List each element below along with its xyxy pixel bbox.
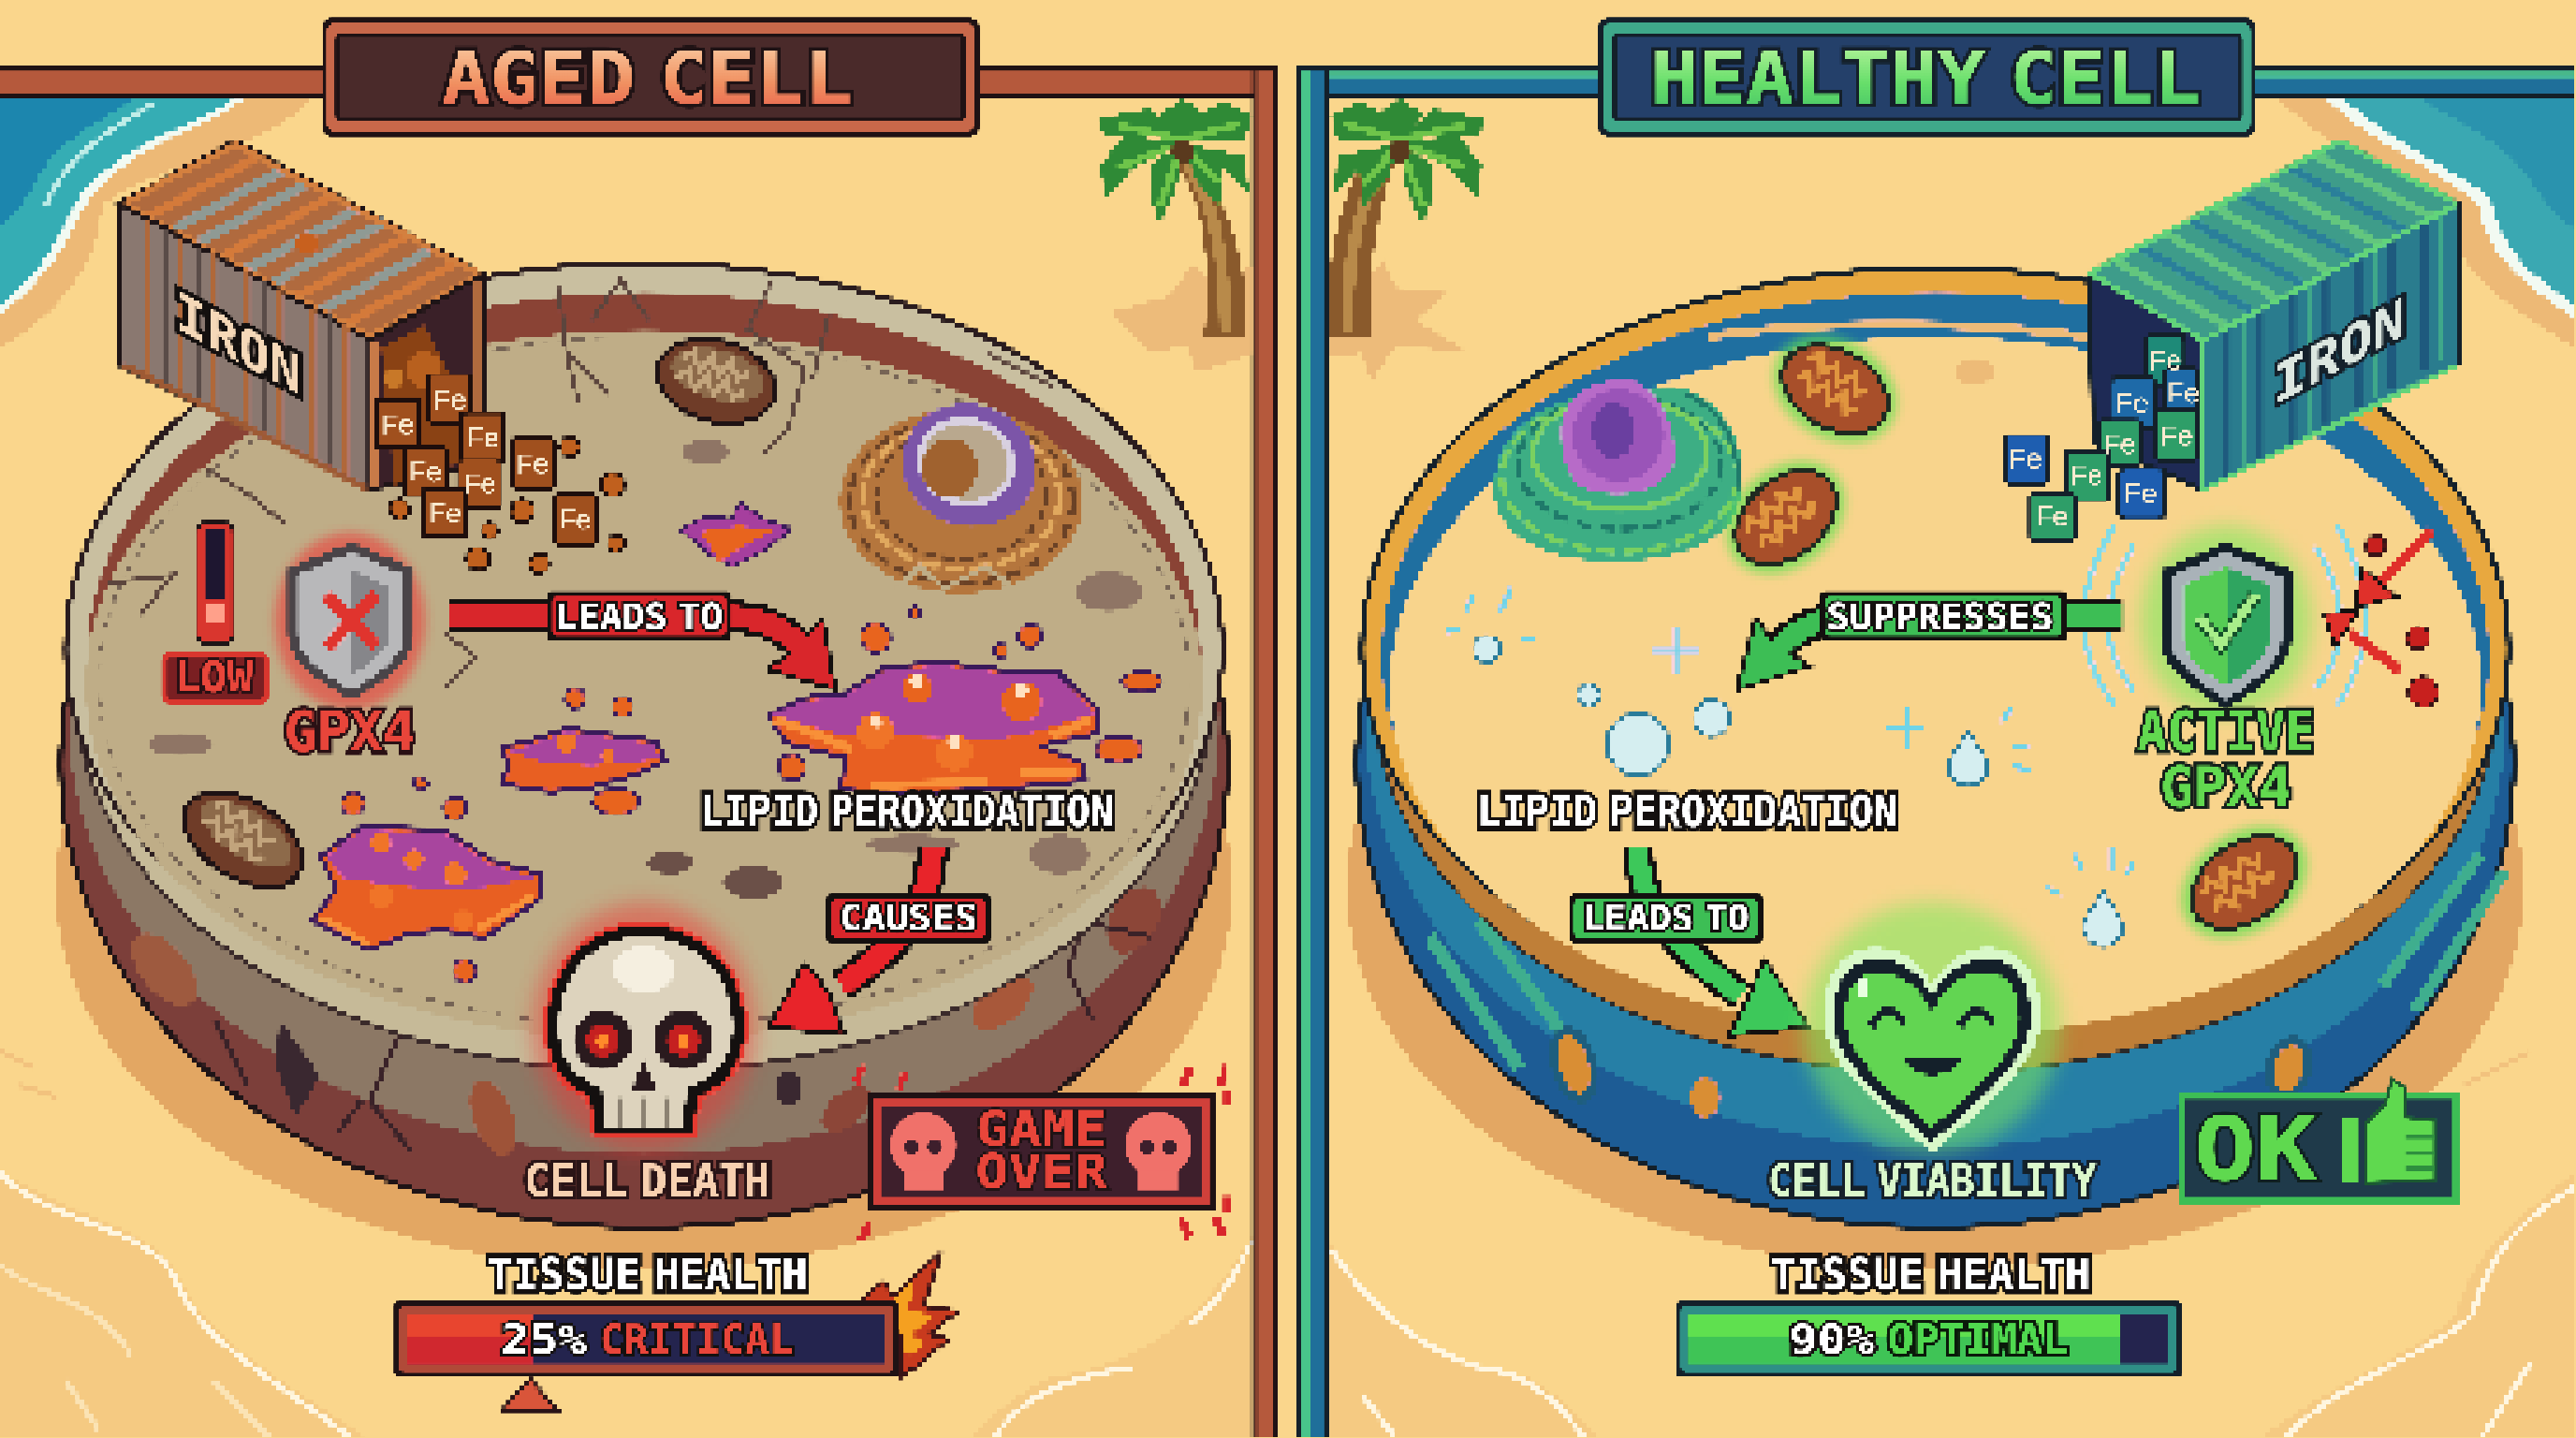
indicator triangle — [503, 1380, 559, 1410]
label: leads to: LEADS TO — [1582, 897, 1749, 939]
iron cubes — [376, 374, 596, 544]
skull icon right — [1125, 1112, 1191, 1190]
health bar 90 percent — [1676, 1301, 2182, 1377]
game over badge: GAME — [976, 1102, 1107, 1157]
lipid droplets — [342, 608, 1162, 983]
sparkles — [1445, 588, 2132, 896]
label: active gpx4: ACTIVE — [2137, 700, 2315, 765]
iron cube labels: Fe — [463, 469, 496, 500]
small purple spill — [681, 503, 792, 567]
label: causes — [827, 894, 990, 943]
leads to arrow — [448, 616, 833, 687]
health bar 25 percent: 25% — [501, 1316, 587, 1364]
iron cube labels: Fe — [429, 498, 461, 529]
title: aged cell: AGED CELL — [442, 37, 853, 122]
label: iron: IRON — [176, 280, 300, 408]
label: leads to: LEADS TO — [555, 596, 723, 638]
iron nuggets — [389, 437, 624, 574]
ocean top left — [0, 95, 315, 348]
healthy mitochondrion one — [1753, 314, 1917, 465]
iron container — [120, 141, 487, 490]
skull icon left — [890, 1112, 956, 1190]
broken shield — [287, 542, 414, 700]
iron cube labels: Fe — [2124, 478, 2157, 509]
aged cell text and badges — [165, 18, 1216, 1377]
iron cube labels — [381, 385, 592, 536]
healthy mitochondrion two — [1704, 437, 1867, 597]
shield glow — [274, 533, 426, 710]
frame: aged panel — [0, 66, 1278, 1438]
energy arcs — [2084, 526, 2364, 705]
healthy cell text and badges — [1477, 18, 2459, 1377]
water droplets — [1473, 636, 2123, 946]
label: lipid peroxidation: LIPID PEROXIDATION — [1477, 786, 1897, 838]
label: tissue health: TISSUE HEALTH — [487, 1250, 808, 1301]
iron cube labels: Fe — [2167, 378, 2200, 409]
game over badge: OVER — [976, 1145, 1107, 1200]
thumb icon — [2343, 1079, 2435, 1183]
floor stains — [148, 439, 1142, 899]
label: active gpx4: GPX4 — [2160, 756, 2291, 821]
label: suppresses: SUPPRESSES — [1827, 596, 2054, 638]
cell floor — [1390, 337, 2481, 1036]
causes arrow — [772, 846, 933, 1032]
stone rim — [66, 263, 1222, 1071]
health bar 25 percent: CRITICAL — [600, 1316, 794, 1364]
ocean top right — [2276, 95, 2576, 348]
heart — [1823, 947, 2041, 1153]
health bar 90 percent: 90% — [1789, 1316, 1875, 1364]
palm tree right — [1327, 98, 1486, 381]
skull — [546, 923, 746, 1137]
low gauge — [198, 522, 233, 644]
iron cube labels: Fe — [2149, 345, 2182, 376]
mitochondrion top — [645, 324, 787, 439]
medium lipid spill — [501, 728, 666, 792]
blue membrane wall — [1357, 299, 2513, 1227]
ground shadow — [1347, 506, 2524, 1269]
frame: healthy panel — [1296, 66, 2576, 1438]
red attack arrows — [2324, 531, 2432, 670]
game over badge — [868, 1093, 1216, 1211]
damaged nucleus and ER — [840, 389, 1083, 594]
cracks — [107, 279, 1051, 690]
iron cube labels: Fe — [2071, 461, 2102, 492]
ground shadow — [56, 506, 1232, 1269]
cell floor — [85, 330, 1203, 1040]
leads to arrow — [1638, 846, 1806, 1034]
cracked membrane wall — [61, 292, 1227, 1227]
iron cube labels: Fe — [559, 505, 592, 536]
lower sand waves — [0, 1051, 2576, 1438]
title: healthy cell: HEALTHY CELL — [1650, 37, 2201, 122]
label: lipid peroxidation: LIPID PEROXIDATION — [700, 786, 1114, 838]
title: healthy cell — [1599, 18, 2256, 137]
label: causes: CAUSES — [840, 897, 977, 939]
shield glow — [2141, 526, 2311, 716]
healthy mitochondrion three — [2159, 802, 2329, 962]
iron cube labels: Fe — [2160, 421, 2193, 452]
active shield — [2160, 542, 2291, 710]
iron cubes healthy — [2004, 335, 2198, 540]
nucleus and golgi — [1494, 380, 1743, 562]
golden rim — [1362, 268, 2509, 1073]
red radicals — [2365, 536, 2438, 707]
large lipid spill — [768, 662, 1099, 795]
label: iron: IRON — [2274, 286, 2405, 418]
panel: healthy cell illustration — [1347, 141, 2524, 1269]
floor shadow band — [1708, 325, 2086, 337]
label: cell viability: CELL VIABILITY — [1767, 1156, 2097, 1208]
suppresses arrow — [1740, 616, 2123, 687]
floor edge line — [98, 337, 1190, 1027]
iron cube labels: Fe — [467, 422, 499, 453]
iron cube labels: Fe — [2036, 502, 2069, 533]
flame — [855, 1252, 958, 1377]
ok badge — [2178, 1079, 2459, 1204]
label: low: LOW — [174, 653, 254, 702]
panel: aged cell illustration — [56, 141, 1232, 1410]
iron cube labels: Fe — [516, 448, 549, 479]
palm tree left — [1097, 98, 1251, 372]
label: gpx4: GPX4 — [285, 700, 416, 765]
lower lipid spill — [312, 827, 542, 949]
iron cube labels: Fe — [433, 385, 466, 416]
iron cube labels: Fe — [2103, 429, 2135, 460]
iron cube labels — [2010, 345, 2200, 533]
mitochondrion lower — [164, 770, 322, 910]
iron cube labels: Fe — [2116, 389, 2149, 419]
label: tissue health: TISSUE HEALTH — [1770, 1250, 2090, 1301]
green iron container — [2089, 141, 2458, 490]
game over sparks — [853, 1062, 1232, 1242]
ok badge: OK — [2194, 1098, 2318, 1201]
health bar 90 percent: OPTIMAL — [1888, 1316, 2069, 1364]
iron cube labels: Fe — [381, 409, 414, 440]
skull glow — [533, 902, 755, 1152]
label: active gpx4 — [2137, 700, 2315, 821]
iron cube labels: Fe — [2010, 444, 2042, 475]
health bar 25 percent — [394, 1301, 899, 1377]
label: cell death: CELL DEATH — [524, 1156, 770, 1208]
iron cube labels: Fe — [409, 457, 442, 488]
heart glow — [1804, 902, 2060, 1152]
title: aged cell — [322, 18, 979, 137]
